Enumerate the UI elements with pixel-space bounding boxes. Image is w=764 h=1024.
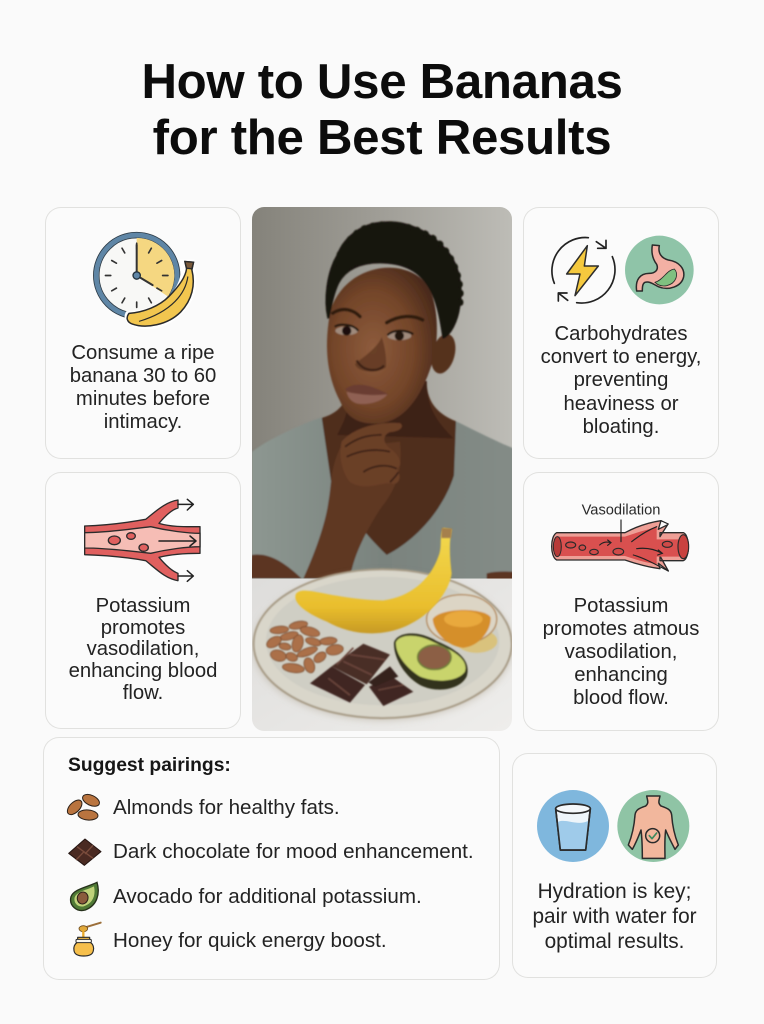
text: energy <box>541 323 701 438</box>
title: How to Use Bananas <box>141 54 623 109</box>
icon: stomach <box>625 236 694 304</box>
wall <box>250 205 515 580</box>
text: blood flow <box>69 595 217 704</box>
icon: torso with check <box>617 790 690 862</box>
photo: woman with food plate <box>252 207 512 731</box>
text: vasodilation: Potassium <box>574 595 668 617</box>
text: blood flow: Potassium <box>96 595 190 617</box>
text: blood flow: flow. <box>123 682 163 704</box>
label: vasodilation: Vasodilation <box>582 503 660 519</box>
row: honey <box>73 922 387 957</box>
text: hydration: optimal results. <box>545 930 684 953</box>
icon: artery with arrows <box>84 498 201 582</box>
panel: vasodilation <box>523 472 719 731</box>
text: hydration: pair with water for <box>532 905 697 928</box>
text: timing: minutes before <box>76 388 210 410</box>
panel: pairings <box>43 737 500 980</box>
text: vasodilation <box>543 595 699 709</box>
title <box>141 54 623 165</box>
icon: avocado <box>70 881 99 912</box>
text: vasodilation: vasodilation, <box>565 641 677 663</box>
text: hydration <box>532 880 697 953</box>
heading: pairings: Suggest pairings: <box>68 755 231 776</box>
text: chocolate: Dark chocolate for mood enhancement. <box>113 840 474 863</box>
text: vasodilation: promotes atmous <box>543 618 699 640</box>
almonds <box>265 620 344 674</box>
text: energy: preventing <box>574 369 668 391</box>
text: avocado: Avocado for additional potassium. <box>113 885 422 908</box>
text: vasodilation: blood flow. <box>573 687 669 709</box>
text: hydration: Hydration is key; <box>538 880 691 903</box>
table <box>250 579 515 737</box>
panel: timing <box>45 207 241 459</box>
text: energy: bloating. <box>583 416 659 438</box>
honey bowl <box>427 595 497 653</box>
text: honey: Honey for quick energy boost. <box>113 929 387 952</box>
text: timing: Consume a ripe <box>71 342 215 364</box>
text: blood flow: vasodilation, <box>87 638 199 660</box>
title: for the Best Results <box>153 110 611 165</box>
panel: energy <box>523 207 719 459</box>
icon: honey jar <box>73 922 102 957</box>
icon: vasodilation vessel <box>551 503 690 572</box>
text: blood flow: promotes <box>101 617 185 639</box>
icon: chocolate <box>68 838 102 866</box>
banana <box>295 528 452 633</box>
text: vasodilation: enhancing <box>574 664 668 686</box>
row: almonds <box>66 794 340 821</box>
text: timing: intimacy. <box>104 411 182 433</box>
text: energy: Carbohydrates <box>554 323 688 345</box>
text: energy: heaviness or <box>564 393 678 415</box>
icon: almonds <box>66 794 100 821</box>
icon: water glass <box>537 790 609 862</box>
text: timing: banana 30 to 60 <box>70 365 216 387</box>
person <box>250 222 513 580</box>
chocolate <box>310 644 413 706</box>
row: chocolate <box>68 838 474 866</box>
row: avocado <box>70 881 422 912</box>
text: blood flow: enhancing blood <box>69 660 217 682</box>
plate <box>253 569 512 720</box>
panel: hydration <box>512 753 717 978</box>
text: almonds: Almonds for healthy fats. <box>113 796 340 819</box>
text: timing <box>70 342 216 433</box>
avocado <box>394 634 468 690</box>
icon: energy bolt with arrows <box>551 236 616 304</box>
text: energy: convert to energy, <box>541 346 701 368</box>
panel: blood flow <box>45 472 241 729</box>
icon: clock and banana <box>93 232 194 327</box>
